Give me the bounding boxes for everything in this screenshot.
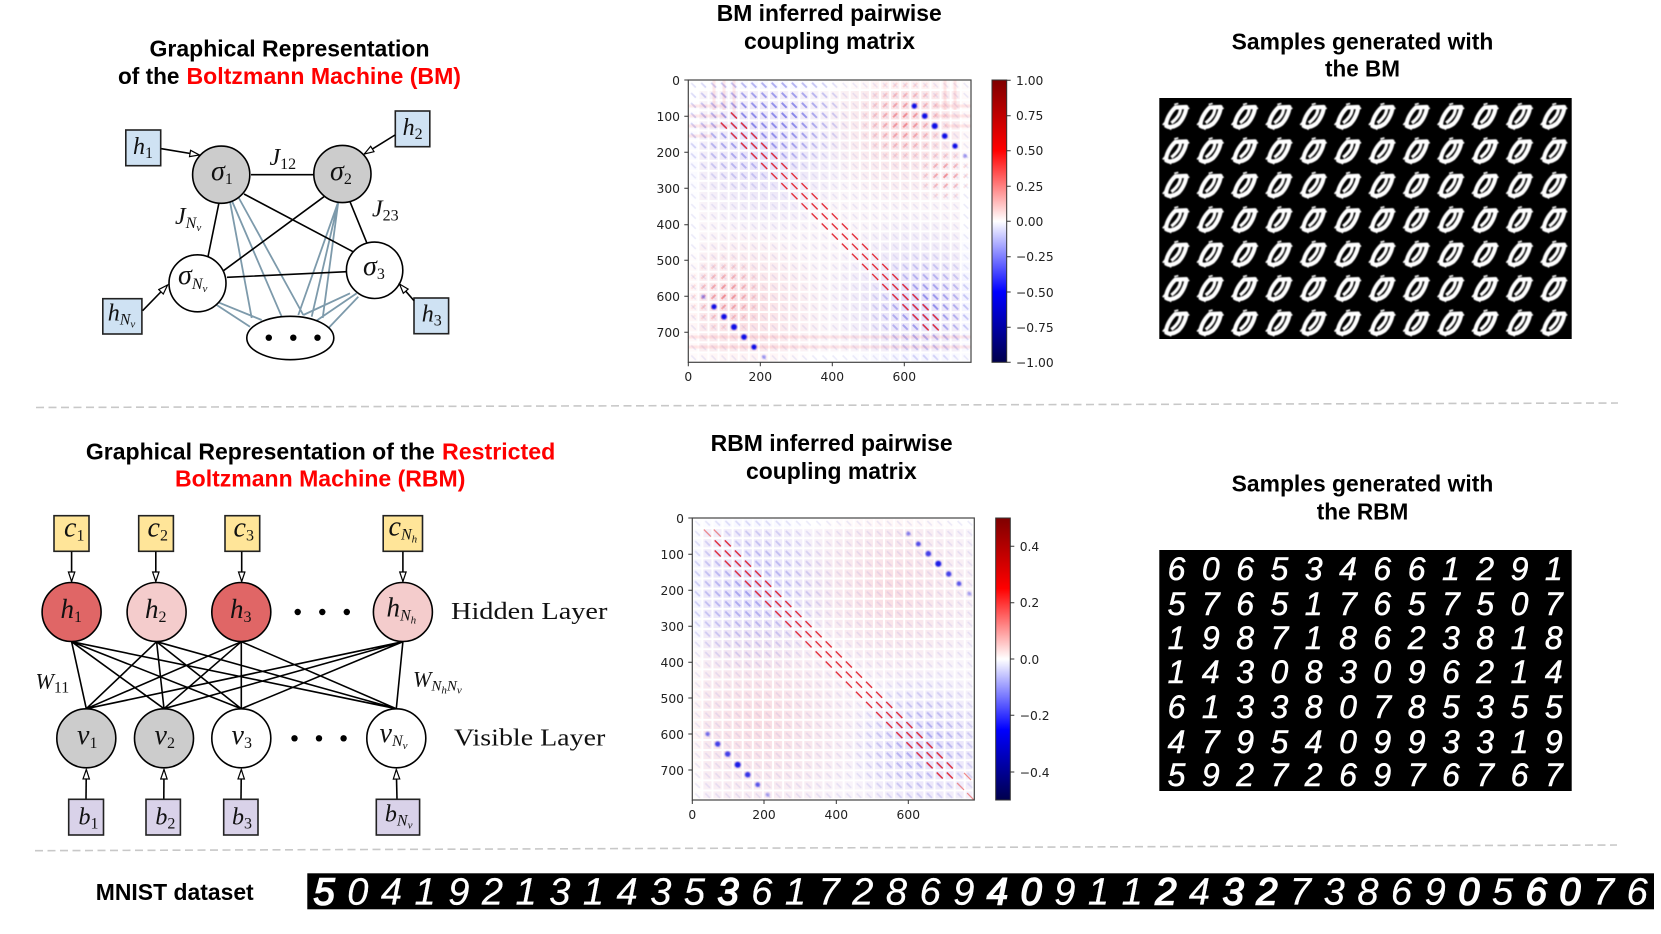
label WNhNv: N [446, 679, 458, 695]
axes: BM matrix ticks: 400 [657, 218, 680, 232]
field hNv [103, 299, 142, 334]
hidden units: h [386, 593, 400, 623]
title: RBM matrix: RBM inferred pairwise [711, 430, 953, 456]
axes: RBM matrix ticks: 0 [688, 808, 696, 822]
hidden units: 3 [244, 609, 252, 626]
bias boxes b: N [396, 813, 409, 830]
field hNv: h [108, 301, 120, 327]
label J23: 23 [383, 208, 399, 225]
colorbar: BM: 1.00 [1016, 74, 1043, 88]
anti-diagonal blue spots [706, 532, 971, 797]
axes: BM matrix ticks: 100 [657, 110, 680, 124]
node sigma Nv [169, 255, 226, 312]
label Hidden Layer: Hidden Layer [451, 599, 607, 625]
visible units: 1 [89, 735, 97, 752]
axes: RBM matrix ticks: 400 [825, 808, 848, 822]
divider: top [36, 403, 1618, 408]
bias boxes c: N [400, 526, 413, 543]
field h3 [414, 298, 449, 334]
axes: BM matrix ticks: 0 [684, 370, 692, 384]
bias boxes b: b [78, 804, 90, 830]
bias boxes c: c [234, 513, 246, 544]
field h1 [126, 130, 161, 166]
bias boxes c: 2 [160, 528, 168, 545]
label JNv: v [196, 222, 201, 234]
colorbar: BM: 0.75 [1016, 109, 1043, 123]
visible units: v [403, 740, 408, 752]
field h3: h [422, 302, 434, 328]
colorbar: RBM: −0.4 [1020, 766, 1050, 780]
colorbar: BM [992, 74, 1054, 370]
image: RBM generated samples grid: 592726976767 [1168, 757, 1564, 793]
label WNhNv: h [441, 685, 447, 697]
hidden units: h [411, 615, 417, 627]
hidden units: h [230, 594, 244, 624]
axes: RBM matrix ticks: 700 [661, 764, 684, 778]
bias boxes b: 3 [244, 815, 252, 832]
image: RBM generated samples grid: 198718623818 [1168, 620, 1563, 656]
hidden units [42, 582, 432, 642]
colorbar: RBM: 0.2 [1020, 596, 1039, 610]
image: RBM generated samples grid: 576517657507 [1168, 586, 1564, 622]
node sigma 2: 2 [344, 171, 352, 188]
field hNv: v [130, 319, 135, 331]
title: BM samples [1232, 28, 1493, 82]
hidden units: h [60, 594, 74, 624]
axes: RBM matrix ticks: 600 [661, 728, 684, 742]
image: MNIST digit strip: 041921314356172869911473869576 [347, 872, 1649, 914]
field hNv: N [119, 312, 132, 329]
colorbar: BM: 0.25 [1016, 180, 1043, 194]
node sigma 3: 3 [377, 266, 385, 283]
axes: RBM matrix ticks: 500 [661, 692, 684, 706]
field h1: 1 [145, 145, 153, 162]
axes: BM matrix ticks: 500 [657, 254, 680, 268]
title: RBM graph [86, 438, 555, 492]
title: BM samples: Samples generated with [1232, 28, 1493, 54]
colorbar: RBM: 0.4 [1020, 540, 1039, 554]
image: RBM generated samples grid: 606534661291 [1168, 551, 1563, 587]
node sigma 1: 1 [225, 171, 233, 188]
field h3: 3 [434, 313, 442, 330]
visible units: v [154, 720, 167, 751]
label WNhNv: v [457, 685, 462, 697]
axes: BM matrix ticks: 700 [657, 326, 680, 340]
field h2: h [403, 115, 415, 141]
title: BM samples: the BM [1325, 56, 1400, 82]
label J12: 12 [280, 156, 296, 173]
axes: RBM matrix ticks: 200 [661, 584, 684, 598]
colorbar: BM: 0.00 [1016, 215, 1043, 229]
colorbar: BM: −1.00 [1016, 356, 1054, 370]
node sigma 1: σ [211, 156, 225, 187]
label J23: J [372, 197, 383, 223]
title: BM matrix: BM inferred pairwise [717, 0, 942, 26]
title: BM matrix [717, 0, 942, 54]
pale red stripes [688, 80, 971, 347]
axes: BM matrix ticks [657, 74, 916, 384]
node sigma Nv: σ [178, 260, 192, 291]
axes: BM matrix ticks: 200 [657, 146, 680, 160]
visible dots [291, 735, 347, 742]
hidden units: 2 [158, 609, 166, 626]
image: BM generated samples grid [1159, 98, 1572, 339]
hidden units: 1 [74, 609, 82, 626]
bias boxes b: b [232, 804, 244, 830]
label WNhNv: W [413, 667, 431, 692]
axes: BM matrix ticks: 600 [657, 290, 680, 304]
node sigma Nv: v [202, 283, 207, 295]
image: RBM generated samples grid: 613380785355 [1168, 689, 1563, 725]
visible units: v [77, 720, 89, 751]
hidden units: N [399, 608, 412, 625]
bias boxes c: c [64, 513, 76, 544]
hidden dots [294, 609, 350, 615]
bias boxes c: h [412, 533, 418, 545]
bipartite weights [72, 642, 403, 709]
bias boxes c: 3 [246, 528, 254, 545]
label W11: W [36, 668, 54, 693]
axes: BM matrix ticks: 0 [672, 74, 680, 88]
label J12: J [270, 145, 280, 171]
axes: BM matrix ticks: 300 [657, 182, 680, 196]
red coupling diagonals [721, 112, 939, 331]
bias boxes b: b [155, 804, 167, 830]
title: RBM matrix [711, 430, 953, 484]
node ellipsis [247, 316, 334, 360]
anti-diagonal blue spots [701, 103, 967, 359]
title: BM graph: Graphical Representation [150, 36, 430, 62]
hidden units: h [145, 594, 158, 624]
bias boxes b [69, 799, 420, 835]
colorbar: BM: −0.75 [1016, 321, 1054, 335]
field h2 [395, 111, 430, 147]
node sigma 3 [346, 242, 403, 298]
node sigma 1 [193, 146, 250, 203]
field h1: h [133, 134, 145, 160]
colorbar: BM: −0.50 [1016, 286, 1054, 300]
panel: BM graphical representation [103, 111, 449, 360]
title: BM graph [118, 36, 461, 89]
colorbar: RBM: 0.0 [1020, 653, 1039, 667]
bias boxes c: 1 [76, 528, 84, 545]
divider: bottom [35, 845, 1617, 851]
node sigma 2: σ [330, 156, 344, 187]
title: RBM samples: the RBM [1317, 498, 1408, 524]
label JNv: J [175, 204, 186, 230]
colorbar: BM: −0.25 [1016, 250, 1054, 264]
colorbar: BM: 0.50 [1016, 144, 1043, 158]
title: BM graph: Boltzmann Machine (BM) [186, 63, 461, 89]
label W11: 11 [54, 679, 69, 696]
axes: RBM matrix ticks: 400 [661, 656, 684, 670]
image: RBM generated samples grid [1159, 550, 1572, 793]
pale diagonal ends [704, 530, 974, 800]
visible units: N [391, 733, 404, 750]
bias boxes b: 1 [90, 815, 98, 832]
black coupling edges [208, 175, 367, 277]
axes: RBM matrix ticks: 200 [752, 808, 776, 822]
arrows b to v [86, 770, 397, 799]
visible units [57, 709, 426, 768]
label: MNIST dataset: MNIST dataset [96, 879, 254, 905]
colorbar: RBM [996, 518, 1050, 800]
axes: BM matrix ticks: 600 [893, 370, 916, 384]
arrows c to h [72, 552, 403, 582]
axes: BM matrix ticks: 400 [821, 370, 844, 384]
axes: RBM matrix ticks: 100 [661, 548, 684, 562]
chart: BM coupling matrix heatmap [688, 79, 972, 363]
colorbar: RBM: −0.2 [1020, 709, 1050, 723]
axes: RBM matrix ticks: 0 [676, 512, 684, 526]
visible units: v [380, 718, 392, 749]
title: RBM samples [1232, 471, 1493, 524]
axes: RBM matrix ticks: 300 [661, 620, 684, 634]
title: RBM matrix: coupling matrix [746, 458, 917, 484]
visible units: 2 [167, 735, 175, 752]
field h2: 2 [415, 126, 423, 143]
axes: BM matrix ticks: 200 [749, 370, 772, 384]
title: BM graph: of the [118, 63, 180, 89]
panel: RBM graphical representation [36, 511, 607, 835]
node sigma 3: σ [363, 251, 377, 282]
title: RBM samples: Samples generated with [1232, 471, 1493, 497]
image: RBM generated samples grid: 143083096214 [1168, 654, 1563, 690]
bias boxes c: c [148, 513, 160, 544]
axes: RBM matrix ticks [661, 512, 920, 822]
axes: RBM matrix ticks: 600 [897, 808, 920, 822]
node sigma Nv: N [191, 276, 204, 293]
chart: RBM coupling matrix heatmap [692, 517, 975, 801]
title: RBM graph: Restricted [442, 438, 555, 464]
title: RBM graph: Boltzmann Machine (RBM) [175, 466, 465, 492]
red coupling diagonals [715, 540, 953, 779]
bias boxes b: 2 [167, 815, 175, 832]
bias boxes b: b [385, 802, 397, 828]
label WNhNv: N [430, 679, 442, 695]
bias boxes b: v [408, 820, 413, 832]
visible units: v [232, 720, 244, 751]
node sigma 2 [314, 145, 371, 203]
label JNv: N [185, 215, 198, 232]
label Visible Layer: Visible Layer [454, 726, 605, 752]
bias boxes c [54, 511, 422, 551]
visible units: 3 [244, 735, 252, 752]
grey-blue edges to remaining nodes [217, 197, 358, 328]
title: RBM graph: Graphical Representation of the [86, 438, 435, 464]
title: BM matrix: coupling matrix [744, 28, 915, 54]
image: MNIST digit strip: 5340232060 [314, 872, 1580, 914]
arrows from fields to nodes [143, 135, 414, 311]
bias boxes c: c [388, 511, 401, 542]
image: RBM generated samples grid: 479540993319 [1168, 724, 1563, 760]
